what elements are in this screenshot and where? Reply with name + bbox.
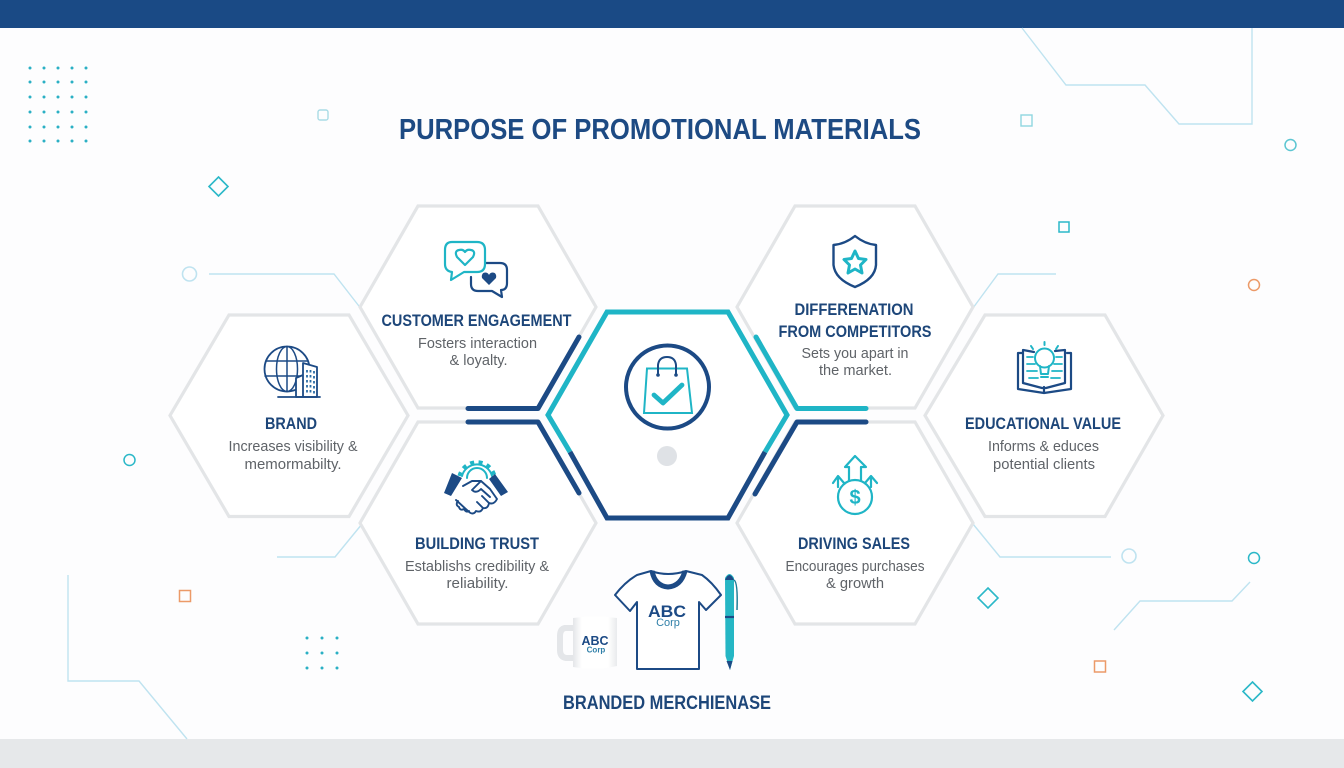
icon: speech bubbles with hearts bbox=[445, 242, 507, 297]
icon: pen bbox=[725, 574, 737, 670]
icon: t-shirt: Corp bbox=[656, 617, 680, 629]
icon: shopping bag with check bbox=[626, 346, 709, 428]
panel: differentiation: the market. bbox=[819, 363, 892, 379]
panel: driving sales: & growth bbox=[826, 576, 884, 592]
icon: dollar with rising arrows: $ bbox=[849, 487, 861, 509]
description: building trust: Establishs credibility & bbox=[405, 559, 549, 575]
panel: differentiation bbox=[737, 206, 973, 408]
panel: customer engagement: & loyalty. bbox=[450, 353, 508, 369]
title: PURPOSE OF PROMOTIONAL MATERIALS bbox=[399, 114, 921, 146]
icon: shield with star bbox=[834, 236, 876, 287]
panel: educational value: potential clients bbox=[993, 457, 1095, 473]
icon: t-shirt bbox=[615, 571, 721, 669]
heading: customer engagement: CUSTOMER ENGAGEMENT bbox=[382, 312, 572, 330]
icon: mug: ABC bbox=[582, 634, 608, 648]
heading: driving sales: DRIVING SALES bbox=[798, 535, 910, 553]
description: brand: Increases visibility & bbox=[228, 439, 358, 455]
icon: t-shirt: ABC bbox=[648, 602, 686, 621]
icon: dollar with rising arrows bbox=[833, 456, 877, 514]
description: differenation: Sets you apart in bbox=[802, 346, 908, 362]
label: branded merchandise: BRANDED MERCHIENASE bbox=[563, 693, 771, 714]
panel: building trust bbox=[360, 422, 596, 624]
merchandise group bbox=[560, 571, 771, 714]
top bar bbox=[0, 0, 1344, 28]
panel: central hexagon bbox=[468, 312, 866, 518]
panel: brand bbox=[170, 315, 408, 516]
panel: brand: memormabilty. bbox=[244, 457, 342, 473]
description: customer engagement: Fosters interaction bbox=[418, 336, 537, 352]
connector lines: right bbox=[756, 337, 866, 408]
icon: mug bbox=[560, 616, 617, 669]
bottom bar bbox=[0, 739, 1344, 768]
panel: educational value bbox=[925, 315, 1163, 516]
panel: driving sales bbox=[737, 422, 973, 624]
icon: handshake with gear bbox=[444, 462, 508, 515]
icon: mug: Corp bbox=[587, 646, 605, 654]
panel: customer engagement bbox=[360, 206, 596, 408]
icon: globe and building bbox=[264, 346, 320, 397]
description: driving sales: Encourages purchases bbox=[786, 559, 924, 575]
heading: differenation from competitors: DIFFERENATION bbox=[794, 301, 914, 319]
panel: building trust: reliability. bbox=[446, 576, 508, 592]
panel: differentiation: FROM COMPETITORS bbox=[778, 323, 932, 341]
grey dot bbox=[657, 446, 677, 466]
heading: educational value: EDUCATIONAL VALUE bbox=[965, 415, 1121, 433]
heading: brand: BRAND bbox=[265, 415, 317, 433]
description: educational value: Informs & educes bbox=[988, 439, 1099, 455]
connector lines: left bbox=[468, 337, 579, 408]
heading: building trust: BUILDING TRUST bbox=[415, 535, 539, 553]
icon: book with light bulb bbox=[1018, 342, 1071, 393]
